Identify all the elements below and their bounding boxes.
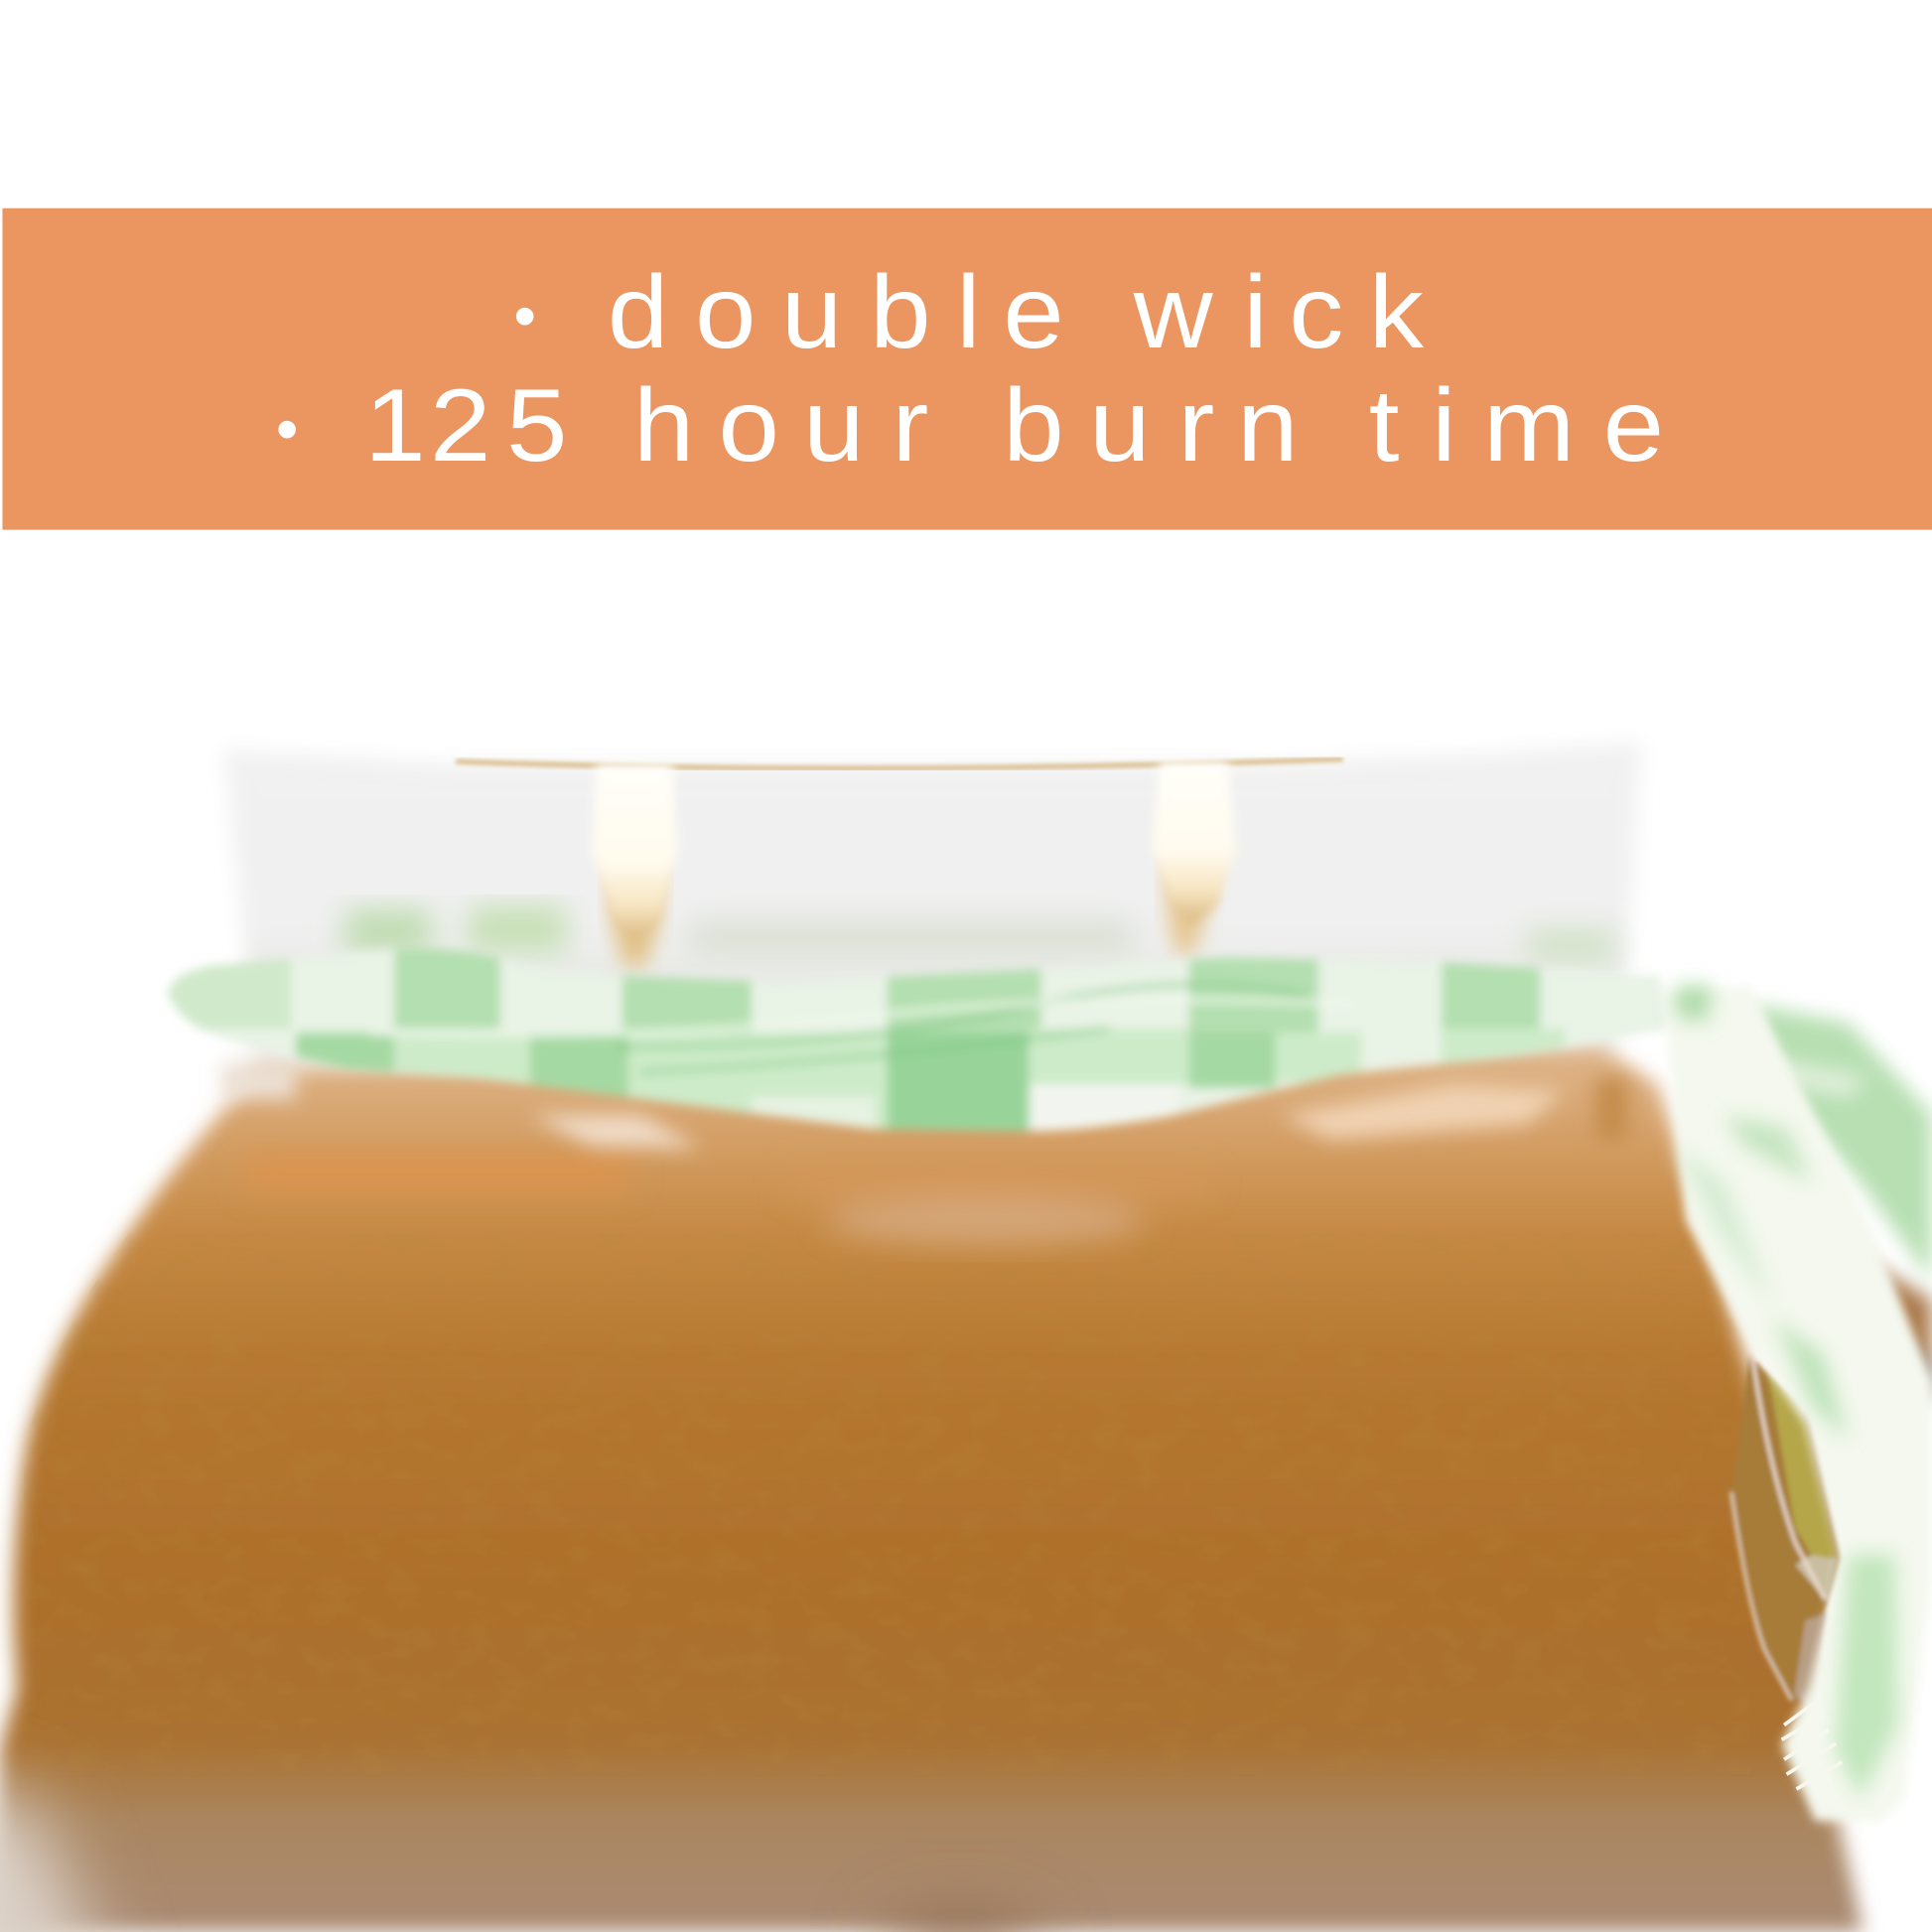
fold creases — [617, 985, 1307, 1072]
upper row checks — [168, 942, 1540, 1035]
bullet line 1: • — [513, 280, 536, 351]
pale lower edge of the jar — [0, 1774, 1035, 1932]
olive inner fold — [1731, 1354, 1842, 1707]
feature: 125 hour burn time: 125 hour burn time — [364, 367, 1664, 483]
right flame — [1165, 863, 1213, 955]
green reflection in the glass — [345, 905, 1614, 960]
wax mottled texture — [24, 1235, 129, 1484]
gold candle rim line — [456, 759, 1343, 768]
right flame core — [1152, 761, 1236, 924]
feature: double wick: double wick — [608, 254, 1424, 369]
frayed ribbon threads — [1782, 1698, 1842, 1789]
left flame core — [592, 763, 678, 942]
upper ribbon tail — [1749, 1004, 1932, 1405]
white square at cloth hem — [1039, 1090, 1172, 1126]
glass neck of the jar — [224, 742, 1641, 1084]
photo: candle jar — [0, 742, 1932, 1932]
ribbon tail green checks — [1676, 986, 1897, 1799]
left flame — [609, 863, 663, 967]
gingham cloth ribbon — [165, 945, 1667, 1138]
wax body of the jar — [0, 1047, 1932, 1932]
bullet line 2: • — [276, 393, 298, 465]
lower row checks — [296, 1033, 1276, 1138]
wax highlights — [246, 1156, 1207, 1244]
hanging ribbon tail — [1663, 986, 1932, 1821]
glass shoulder highlights — [221, 1062, 1627, 1149]
orange feature banner — [2, 208, 1932, 530]
